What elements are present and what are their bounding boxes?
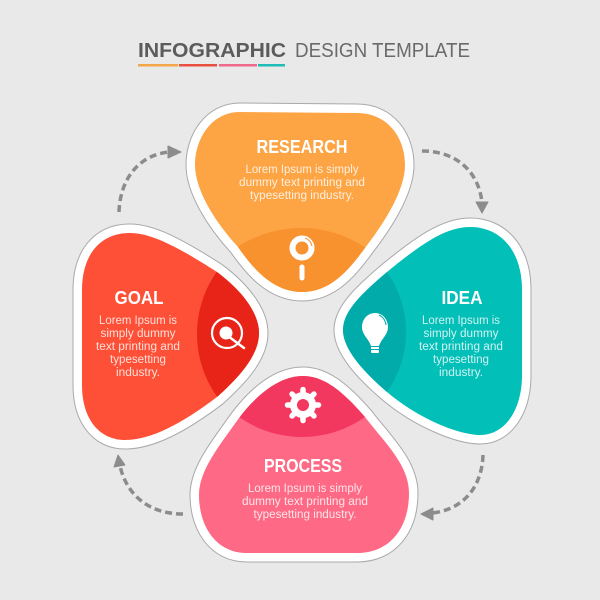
icon: light bulb bbox=[362, 313, 388, 353]
arrow: research to idea bbox=[422, 151, 488, 213]
idea text: Lorem Ipsum is bbox=[422, 315, 500, 327]
research text: typesetting industry. bbox=[250, 190, 354, 202]
research text bbox=[239, 164, 365, 202]
research text: dummy text printing and bbox=[239, 177, 365, 189]
panel: process bbox=[190, 366, 418, 562]
process heading: PROCESS bbox=[264, 456, 342, 476]
title bbox=[138, 40, 470, 62]
title: INFOGRAPHIC bbox=[138, 40, 286, 62]
icon: target bbox=[212, 318, 244, 348]
idea text bbox=[419, 315, 503, 379]
goal text: industry. bbox=[116, 367, 160, 379]
panel: goal bbox=[72, 224, 268, 450]
goal text bbox=[96, 315, 180, 379]
idea text: text printing and bbox=[419, 341, 503, 353]
process text: Lorem Ipsum is simply bbox=[248, 483, 362, 495]
arrow: idea to process bbox=[421, 455, 483, 520]
idea text: simply dummy bbox=[424, 328, 499, 340]
process text: typesetting industry. bbox=[254, 509, 356, 521]
goal text: Lorem Ipsum is bbox=[99, 315, 177, 327]
idea text: industry. bbox=[439, 367, 483, 379]
goal text: typesetting bbox=[110, 354, 166, 366]
arrow: goal to research bbox=[119, 146, 181, 212]
title underline bbox=[138, 64, 285, 66]
icon: magnifier bbox=[292, 238, 312, 278]
idea heading: IDEA bbox=[442, 288, 482, 308]
panel: research bbox=[186, 102, 414, 302]
icon: gear bbox=[288, 390, 318, 420]
panel: idea bbox=[334, 218, 532, 444]
title: DESIGN TEMPLATE bbox=[295, 40, 470, 62]
goal text: text printing and bbox=[96, 341, 180, 353]
research heading: RESEARCH bbox=[256, 137, 348, 157]
process text bbox=[242, 483, 368, 521]
process text: dummy text printing and bbox=[242, 496, 368, 508]
idea text: typesetting bbox=[433, 354, 489, 366]
arrow: process to goal bbox=[114, 455, 183, 514]
research text: Lorem Ipsum is simply bbox=[246, 164, 359, 176]
goal text: simply dummy bbox=[100, 328, 176, 340]
goal heading: GOAL bbox=[114, 288, 164, 308]
